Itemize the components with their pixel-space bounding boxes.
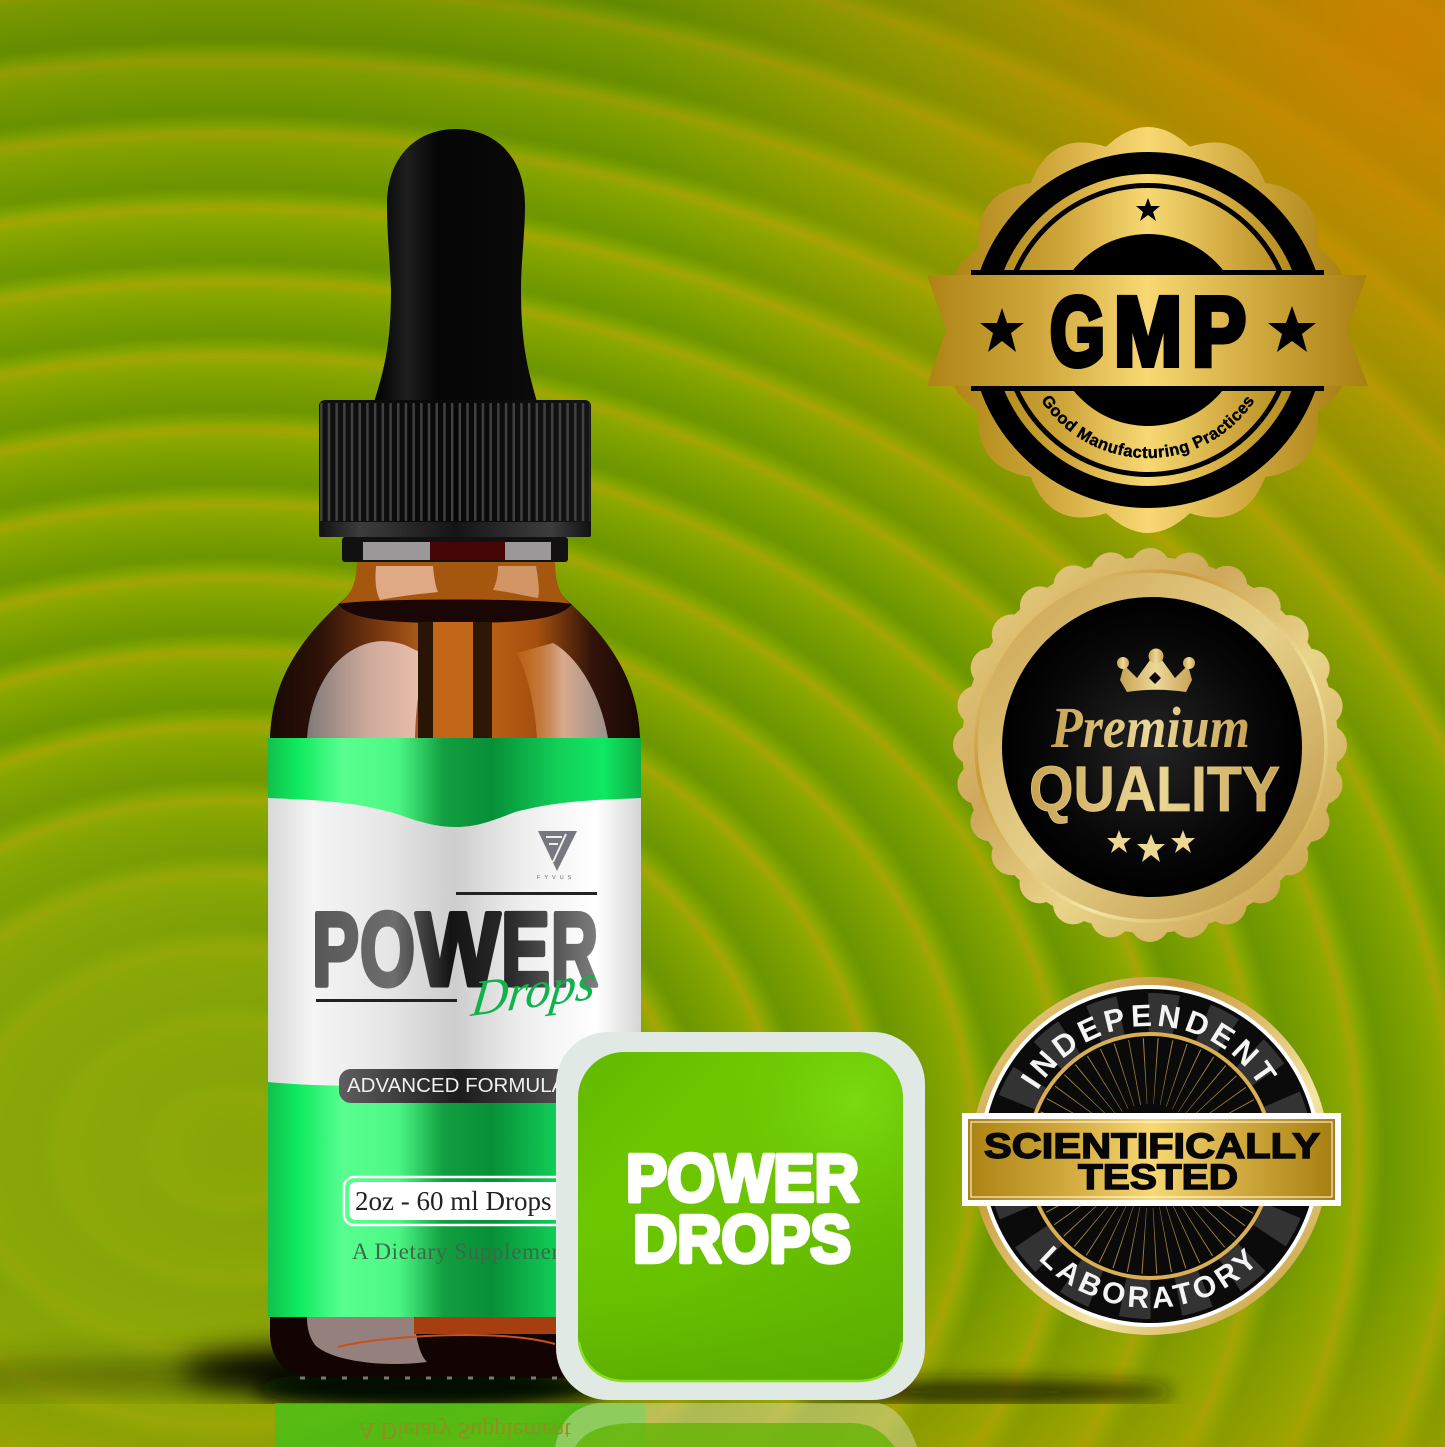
left glass reflection bbox=[307, 641, 430, 738]
badge: scientifically tested laboratory bbox=[962, 977, 1341, 1335]
crown jewel bbox=[1149, 672, 1161, 684]
ribbon left star bbox=[980, 308, 1024, 352]
crown icon bbox=[1117, 648, 1195, 692]
grey band segments bbox=[1007, 1013, 1293, 1299]
cube DROPS text: DROPS bbox=[633, 1202, 851, 1277]
scalloped rim bbox=[962, 557, 1338, 933]
POWER title bbox=[312, 892, 598, 1008]
dropper collar bbox=[342, 537, 568, 562]
dropper bottle bbox=[268, 129, 641, 1378]
Premium script: Premium bbox=[1050, 695, 1250, 760]
ribbon right star bbox=[1268, 306, 1316, 352]
liquid surface bbox=[338, 600, 572, 623]
label rule bottom bbox=[316, 999, 457, 1002]
ribbon edges bbox=[971, 270, 1324, 391]
Drops script: Drops bbox=[468, 954, 599, 1028]
POWER title: R bbox=[551, 892, 598, 1008]
brand logo: FYVUS bbox=[537, 875, 575, 881]
bottle neck amber bbox=[340, 562, 570, 604]
POWER title: E bbox=[501, 892, 550, 1008]
sunburst disc bbox=[1028, 1034, 1272, 1278]
bottle base bbox=[270, 1317, 640, 1378]
black band bbox=[983, 989, 1317, 1323]
banner gold bbox=[968, 1119, 1335, 1200]
cube POWER text: POWER bbox=[626, 1141, 859, 1216]
top star bbox=[1136, 198, 1160, 221]
TESTED text: TESTED bbox=[1078, 1158, 1238, 1197]
right glass reflection bbox=[517, 643, 608, 738]
cube face bbox=[578, 1052, 903, 1382]
badge: GMP bbox=[927, 127, 1368, 533]
banner white border bbox=[962, 1113, 1341, 1206]
supplement line: A Dietary Supplement bbox=[352, 1239, 571, 1264]
ribbon bbox=[927, 275, 1368, 386]
label rule top bbox=[456, 892, 597, 895]
POWER title: O bbox=[360, 892, 415, 1008]
GMP text bbox=[1050, 277, 1246, 386]
advanced formula pill: ADVANCED FORMULA bbox=[347, 1074, 566, 1097]
QUALITY text: QUALITY bbox=[1029, 753, 1280, 825]
neck highlights bbox=[375, 566, 438, 600]
inner ring bbox=[976, 571, 1326, 921]
GMP text: G bbox=[1050, 277, 1105, 386]
black disc bbox=[1002, 597, 1302, 897]
GMP text: M bbox=[1114, 277, 1182, 386]
floor reflection: A Dietary Supplement bbox=[358, 1417, 571, 1443]
LABORATORY arc text: LABORATORY bbox=[1040, 1246, 1253, 1308]
three stars bbox=[1107, 830, 1195, 862]
gold outer ring bbox=[975, 981, 1325, 1331]
dropper bulb bbox=[374, 129, 537, 402]
dropper tube bbox=[418, 622, 492, 738]
ribbon lower arc text: Good Manufacturing Practices bbox=[1042, 396, 1254, 458]
cube bottom gloss rim bbox=[579, 1342, 902, 1381]
GMP text: P bbox=[1192, 277, 1246, 386]
white label panel bbox=[268, 798, 641, 1086]
glass bottle bbox=[270, 562, 640, 1378]
size box bbox=[344, 1177, 570, 1225]
brand logo bbox=[537, 831, 577, 881]
scalloped seal bbox=[949, 127, 1347, 533]
POWER title: P bbox=[312, 892, 359, 1008]
size box: 2oz - 60 ml Drops bbox=[355, 1186, 551, 1216]
cube frame bbox=[556, 1032, 925, 1400]
sunburst rays bbox=[1065, 1071, 1235, 1241]
INDEPENDENT arc text: INDEPENDENT bbox=[1020, 1004, 1278, 1089]
POWER title: W bbox=[416, 892, 501, 1008]
floor reflection bbox=[275, 1402, 917, 1447]
black rings bbox=[981, 163, 1315, 497]
center disc bbox=[1052, 234, 1244, 426]
floor shadow bbox=[0, 1346, 1175, 1408]
ribbed cap bbox=[319, 400, 591, 537]
green product cube bbox=[556, 1032, 925, 1400]
SCIENTIFICALLY text: SCIENTIFICALLY bbox=[984, 1127, 1320, 1166]
badge: premium quality bbox=[962, 557, 1338, 933]
advanced formula pill bbox=[339, 1069, 579, 1103]
green label bbox=[268, 738, 641, 1317]
